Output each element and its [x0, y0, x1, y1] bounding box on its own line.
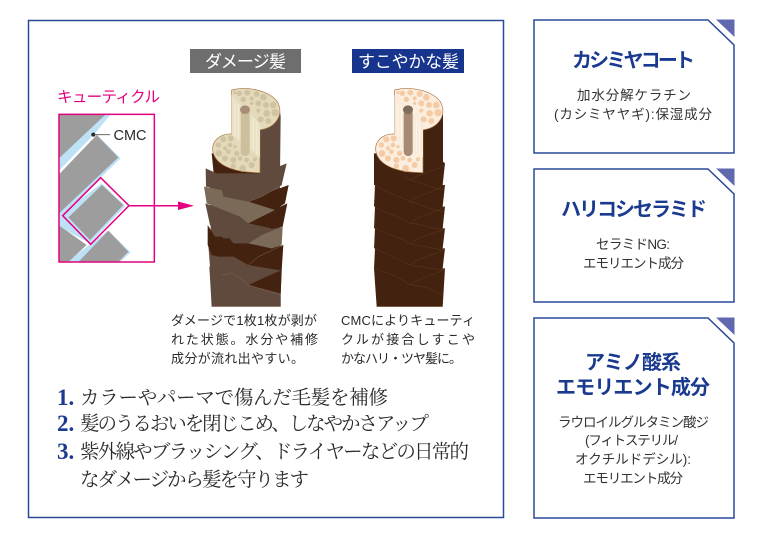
text: healthy hair caption: クルが接合しすこや — [341, 332, 475, 347]
list: benefits: 髪のうるおいを閉じこめ、しなやかさアップ — [80, 413, 429, 435]
card: amino acid emollient: エモリエント成分 — [583, 471, 684, 486]
card: amino acid emollient: オクチルドデシル): — [575, 451, 691, 467]
cross-section disc — [376, 88, 443, 173]
list: benefits: 3. — [57, 439, 74, 464]
heading: healthy hair: すこやかな髪 — [358, 52, 459, 72]
card: amino acid emollient: ラウロイルグルタミン酸ジ — [558, 415, 709, 430]
card: cashmere coat: 加水分解ケラチン — [577, 88, 691, 103]
card: amino acid emollient — [534, 318, 734, 518]
list: benefits: カラーやパーマで傷んだ毛髪を補修 — [80, 387, 388, 409]
card: amino acid emollient: エモリエント成分 — [556, 375, 710, 399]
list: benefits: 1. — [57, 385, 74, 410]
panel: hair comparison — [28, 20, 504, 518]
card: amino acid emollient: アミノ酸系 — [585, 351, 681, 374]
illustration: healthy hair — [374, 88, 445, 307]
heading: damaged hair: ダメージ髪 — [205, 52, 286, 72]
text: healthy hair caption — [341, 313, 475, 366]
diagram: cuticle close-up — [59, 114, 154, 262]
text: damaged hair caption: れた状態。水分や補修 — [171, 332, 318, 347]
label: CMC: CMC — [114, 128, 147, 144]
arrow: cuticle to hair — [129, 202, 194, 210]
heading: damaged hair — [190, 49, 301, 73]
cross-section disc — [213, 88, 280, 173]
text: damaged hair caption: 成分が流れ出やすい。 — [171, 351, 304, 366]
card: cashmere coat — [534, 20, 734, 153]
card: hari koshi ceramide: エモリエント成分 — [583, 256, 684, 271]
card: hari koshi ceramide — [534, 168, 734, 302]
text: damaged hair caption: ダメージで1枚1枚が剥が — [171, 313, 317, 328]
list: benefits: なダメージから髪を守ります — [80, 469, 309, 491]
illustration: damaged hair — [204, 88, 289, 307]
card: amino acid emollient: (フィトステリル/ — [585, 433, 678, 448]
text: healthy hair caption: CMCによりキューティ — [341, 313, 475, 328]
text: damaged hair caption — [171, 313, 318, 366]
list: benefits: 2. — [57, 411, 74, 436]
text: healthy hair caption: かなハリ・ツヤ髪に。 — [341, 351, 462, 366]
card: hari koshi ceramide: ハリコシセラミド — [561, 199, 707, 221]
card: hari koshi ceramide: セラミドNG: — [596, 237, 670, 252]
list: benefits — [57, 385, 469, 491]
card: cashmere coat: (カシミヤヤギ):保湿成分 — [554, 107, 712, 122]
card: cashmere coat: カシミヤコート — [572, 50, 695, 72]
list: benefits: 紫外線やブラッシング、ドライヤーなどの日常的 — [80, 441, 469, 463]
label: cuticle: キューティクル — [57, 88, 160, 106]
